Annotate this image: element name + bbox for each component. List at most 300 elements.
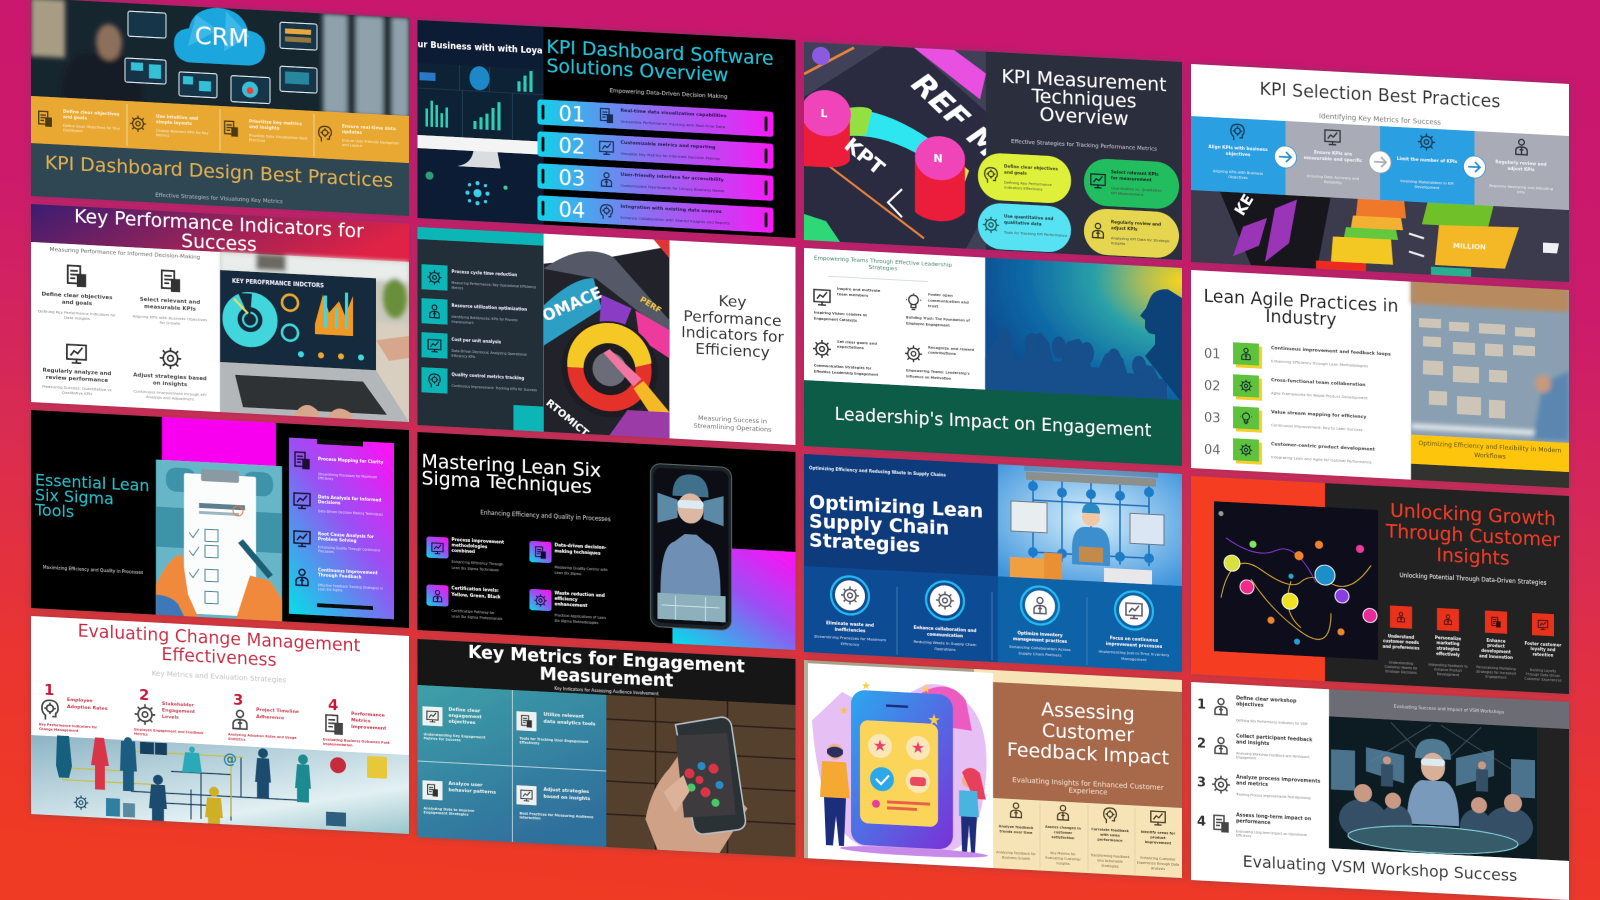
list: numbered capabilities: 03 <box>558 164 585 191</box>
subtitle: Empowering Data-Driven Decision Making <box>610 88 728 100</box>
columns: four strategies: Streamlining Processes for Maximum <box>814 634 886 642</box>
panel: Assessing Customer Feedback Impact <box>804 660 1182 878</box>
sidebar: Resource utilization optimization <box>452 303 527 312</box>
pills: four strategies: Define clear objectives <box>1004 164 1058 171</box>
columns: feedback actions <box>996 800 1179 876</box>
band: four best practices: and Layout <box>342 143 363 148</box>
band: four best practices: Define Clear Objectives for Your <box>63 124 121 131</box>
image: planning board: Optimizing Efficiency and Flexibility in Modern <box>1418 440 1562 455</box>
columns: four insight actions: Personalize <box>1435 635 1461 641</box>
band: four best practices: Ensure User-Friendly Navigation <box>342 138 399 145</box>
list: four metrics: Evaluating Business Outcomes Post <box>323 737 390 745</box>
list: workshop steps: and insights <box>1236 739 1269 747</box>
list: four metrics: 3 <box>233 691 243 709</box>
columns: four strategies: Operations <box>934 646 956 652</box>
panel: gradient tools list: Data-Driven Decision Making Techniques <box>318 509 383 517</box>
subtitle: Unlocking Potential Through Data-Driven Strategies <box>1399 573 1547 587</box>
columns: four insight actions: Customer Needs for <box>1385 665 1418 671</box>
heading: Through Customer <box>1385 521 1560 552</box>
panel: teal metrics grid: Define clear <box>448 707 481 714</box>
grid: techniques: Practical Applications of Lean <box>554 613 606 620</box>
grid: techniques: Lean Six Sigma <box>554 571 581 576</box>
columns: four insight actions: development <box>1481 648 1511 654</box>
subtitle: Identifying Key Metrics for Success <box>1319 112 1441 127</box>
panel: Optimizing Lean Supply Chain Strategies <box>804 454 1182 672</box>
grid: leadership items: Inspiring Vision: Leaders as <box>814 311 867 317</box>
grid: four objectives: and goals <box>62 300 93 307</box>
image: planning board <box>1411 278 1569 488</box>
columns: four insight actions <box>1383 605 1562 683</box>
list: four metrics: Analyzing Adoption Rates and Usage <box>228 732 297 740</box>
list: workshop steps: Defining Key Performance Indicators for VSM <box>1236 718 1308 726</box>
list: workshop steps: 3 <box>1197 775 1206 791</box>
pills: four strategies: Analyzing KPI Data for Strategic <box>1111 236 1170 243</box>
columns: feedback actions: Experience through Data <box>1137 861 1179 867</box>
panel: gradient tools list: Effective Feedback Training Strategies in <box>318 583 383 591</box>
heading: Measurement <box>540 664 673 692</box>
panel: gradient tools list: Decisions <box>318 499 341 505</box>
list: four metrics <box>39 680 390 749</box>
band: four best practices: Metrics <box>156 133 169 138</box>
grid: four objectives: Defining Key Performance Indicators for <box>38 308 116 318</box>
columns: four selection steps: Limit the number of KPIs <box>1397 156 1458 165</box>
grid: leadership items: Set clear goals and <box>837 340 877 346</box>
heading: Six Sigma <box>35 485 114 508</box>
panel: teal metrics grid: Analyze user <box>449 781 483 788</box>
columns: four insight actions: Strategies for Increased <box>1476 670 1516 676</box>
pills: four strategies: Use quantitative and <box>1004 214 1053 221</box>
panel: teal metrics grid: data analytics tools <box>543 719 596 727</box>
panel: KPI Selection Best Practices <box>1191 64 1570 282</box>
gradient corner block <box>672 545 796 650</box>
columns: four strategies: communication <box>927 632 963 638</box>
list: numbered capabilities: Customizable Dashboards for Unique Business Needs <box>620 183 725 193</box>
heading: Effectiveness <box>161 645 277 671</box>
sidebar: Data-Driven Decisions: Analyzing Operational <box>451 349 527 357</box>
panel: teal metrics grid: Analyzing Data to Improve <box>423 806 475 813</box>
columns: four strategies: Efficiency <box>841 641 860 647</box>
heading: Optimizing Lean <box>809 491 983 522</box>
columns: four insight actions: strategies <box>1437 646 1460 652</box>
subtitle: Optimizing Efficiency and Reducing Waste in Supply Chains <box>809 465 946 478</box>
image: phone with helmeted woman <box>650 463 732 631</box>
pills: four strategies: qualitative data <box>1004 220 1042 227</box>
columns: four selection steps: objectives <box>1226 151 1251 158</box>
image: customer rating illustration: ★ <box>921 682 931 696</box>
grid: leadership items: Foster open <box>928 293 953 298</box>
columns: feedback actions: Assess changes in <box>1045 825 1081 831</box>
list: four metrics: Project Timeline <box>256 707 299 715</box>
heading: Evaluating Change Management <box>78 621 361 656</box>
columns: four insight actions: Personalizing Marketing <box>1476 665 1516 671</box>
image: performance gauge: OMACE <box>539 283 605 325</box>
list: four practices: Enhancing Efficiency through Lean Methodologies <box>1271 358 1368 368</box>
list: numbered capabilities: User-friendly interface for accessibility <box>620 172 724 183</box>
grid: leadership items <box>813 285 975 382</box>
columns: four insight actions: retention <box>1532 652 1554 658</box>
list: four metrics: Adoption Rates <box>67 704 108 712</box>
image: customer rating illustration: ★ <box>873 736 887 755</box>
list: workshop steps: Collect participant feedback <box>1236 733 1313 743</box>
list: four practices <box>1204 341 1391 472</box>
orange block <box>1191 476 1325 681</box>
band: four best practices: Choose Relevant KPIs for Key <box>156 129 209 135</box>
photo: CRM cloud with executive <box>31 0 409 118</box>
list: numbered capabilities: 04 <box>558 196 585 223</box>
grid: four objectives: Regularly analyze and <box>43 368 111 377</box>
list: workshop steps: 4 <box>1197 814 1206 830</box>
image: gauge with red cylinders: KPT <box>840 133 889 180</box>
band: four best practices: Define clear objectives <box>63 109 120 118</box>
grid: four objectives: Measuring Success: Quantitative vs <box>42 384 112 392</box>
panel: Key Performance Indicators for Success <box>31 204 409 422</box>
grid: four objectives: measurable KPIs <box>144 304 197 313</box>
columns: four strategies: Management <box>1121 656 1147 662</box>
list: four practices: 03 <box>1204 411 1221 427</box>
image: 3D blocks and board: KE TIM <box>1231 161 1275 219</box>
panel: gradient tools list: Problem Solving <box>318 536 357 543</box>
grid: four objectives: review performance <box>46 375 108 384</box>
panel: teal metrics grid: Interaction <box>520 815 541 821</box>
grid: leadership items: Empowering Teams: Leadership's <box>906 368 970 376</box>
list: four practices: 01 <box>1204 347 1221 363</box>
panel: Evaluating Change Management Effectiveness <box>31 616 409 834</box>
columns: four selection steps: Align KPIs with business <box>1208 144 1268 153</box>
columns: feedback actions: Correlate feedback <box>1091 827 1129 833</box>
columns: feedback actions: Enhancing Customer <box>1140 856 1176 862</box>
list: workshop steps: 2 <box>1197 736 1206 752</box>
band: four best practices: and goals <box>63 114 87 121</box>
grid: techniques: Certification levels: <box>451 585 499 594</box>
list: workshop steps: Analyzing Workshop Feedback and Participant <box>1236 751 1310 759</box>
grid: leadership items: Effective Leadership Engagement <box>814 370 879 377</box>
heading: Key <box>718 292 747 311</box>
grid: techniques <box>426 535 608 627</box>
grid: leadership items: team members <box>837 292 869 298</box>
image: gauge with red cylinders: L <box>820 107 828 120</box>
heading: Strategies <box>809 529 920 557</box>
pills: four strategies: and goals <box>1004 170 1027 176</box>
list: workshop steps: Assess long-term impact on <box>1236 812 1312 822</box>
columns: four insight actions: Enhance <box>1486 638 1506 644</box>
heading: Indicators for <box>681 323 784 346</box>
columns: four insight actions: and innovation <box>1479 653 1513 660</box>
list: four metrics: Change Management <box>39 727 79 733</box>
heading: Supply Chain <box>809 510 949 540</box>
list: four metrics: 1 <box>44 681 54 699</box>
list: four metrics: Metrics <box>134 732 148 737</box>
pills: four strategies: Insights <box>1111 241 1125 246</box>
title panel <box>993 682 1182 808</box>
icon: CRM cloud <box>174 6 265 66</box>
subtitle: Evaluating Success and Impact of VSM Workshops <box>1394 704 1505 716</box>
heading: Tools <box>34 500 74 521</box>
columns: feedback actions: Strategies <box>1101 864 1119 869</box>
image: glowing customer journey network <box>1214 501 1378 660</box>
columns: four insight actions: Development <box>1437 672 1460 677</box>
pills: four strategies: Regularly review and <box>1111 219 1161 227</box>
title panel: Feedback Impact <box>1007 739 1169 769</box>
columns: four selection steps: Aligning KPIs with Business <box>1213 169 1263 176</box>
list: four practices: 04 <box>1204 443 1221 459</box>
heading: Mastering Lean Six <box>422 450 601 482</box>
grid: four objectives: Analysis and Adjustment <box>146 394 195 402</box>
pills: four strategies: Defining Key Performance <box>1004 181 1053 187</box>
list: workshop steps: objectives <box>1236 701 1264 709</box>
subtitle: Key Metrics and Evaluation Strategies <box>152 668 287 685</box>
columns: four strategies: Supply Chain Partners <box>1019 650 1061 658</box>
panel: teal metrics grid: Adjust strategies <box>543 787 589 795</box>
columns: four insight actions: Enhance Product <box>1434 667 1463 673</box>
grid: leadership items: expectations <box>837 345 865 350</box>
grid: four objectives: Select relevant and <box>140 297 200 306</box>
grid: leadership items: Recognize and reward <box>928 346 975 352</box>
grid: techniques: enhancement <box>554 601 587 609</box>
list: numbered capabilities: Streamline Performance Tracking with Real-Time Data <box>620 119 726 129</box>
columns: four selection steps: Reliability <box>1324 180 1343 185</box>
columns: four strategies <box>814 575 1170 669</box>
list: four practices: Value stream mapping for efficiency <box>1271 409 1366 420</box>
image: customer rating illustration: ★ <box>911 738 925 757</box>
grid: four objectives: Qualitative KPIs <box>62 390 92 396</box>
panel: teal metrics grid: Effectively <box>520 740 540 746</box>
image: dashboard monitor: ur Business with with Loya <box>418 40 542 57</box>
columns: feedback actions: Business Growth <box>1002 855 1030 861</box>
image: connected people network: @ <box>223 751 237 768</box>
panel: teal metrics grid <box>418 685 606 847</box>
image: performance gauge: RTOMICT <box>544 398 590 439</box>
image: 3D blocks and board: MILLION <box>1453 242 1486 252</box>
sidebar: Process cycle time reduction <box>452 269 517 277</box>
columns: feedback actions: into Actionable <box>1097 859 1123 864</box>
band: four best practices: Practices <box>249 138 265 143</box>
columns: four insight actions: Building Loyalty <box>1530 668 1556 673</box>
panel: Unlocking Growth Through Customer Insights <box>1191 476 1569 694</box>
panel: teal metrics grid: Engagement Strategies <box>423 810 469 817</box>
panel: gradient tools list: Process Mapping for Clarity <box>318 456 384 465</box>
list: numbered capabilities: 01 <box>558 100 585 127</box>
title panel: Customer <box>1042 720 1134 746</box>
panel: teal metrics grid: Understanding Key Engagement <box>424 732 486 740</box>
title panel: Experience <box>1068 787 1108 797</box>
subtitle: Enhancing Efficiency and Quality in Processes <box>480 510 611 523</box>
grid: four objectives: Adjust strategies based <box>133 372 207 382</box>
list: numbered capabilities <box>538 99 774 233</box>
columns: four selection steps: Regularly review and <box>1495 159 1547 168</box>
columns: four selection steps: adjust KPIs <box>1507 166 1535 173</box>
grid: four objectives: Data Insights <box>64 315 90 321</box>
sidebar: Metrics <box>452 286 464 290</box>
columns: four strategies: inefficiencies <box>835 627 866 633</box>
columns: feedback actions: Evaluating Customer <box>1045 856 1081 862</box>
band: four best practices: simple layouts <box>156 119 192 127</box>
panel: Key Performance Indicators for Efficiency <box>418 227 796 450</box>
grid: leadership items: Inspire and motivate <box>837 287 881 293</box>
grid: four objectives: Continuous Improvement through KPI <box>133 388 207 397</box>
columns: four strategies: management practices <box>1013 636 1068 644</box>
grid: techniques: methodologies <box>452 542 488 550</box>
image: gauge with red cylinders: REF M <box>905 67 1006 165</box>
columns: feedback actions: Analyze feedback <box>999 824 1034 830</box>
panel: teal metrics grid: engagement <box>448 713 482 720</box>
columns: four selection steps: Development <box>1415 185 1440 190</box>
pills: four strategies: Select relevant KPIs <box>1111 169 1159 177</box>
grid: techniques: Certification Pathway for <box>451 609 495 615</box>
image: gauge with red cylinders: N <box>933 152 943 165</box>
grid: leadership items: contributions <box>928 351 957 356</box>
columns: four insight actions: Understand <box>1388 633 1414 640</box>
image: customer rating illustration: ★ <box>839 704 849 717</box>
columns: feedback actions: Identify areas for <box>1141 830 1175 836</box>
columns: four insight actions: product <box>1487 643 1505 649</box>
grid: four objectives: for Growth <box>160 320 181 326</box>
panel: gradient tools list: Root Cause Analysis for <box>318 531 375 539</box>
heading: Sigma Techniques <box>422 467 592 498</box>
list: four practices: Cross-functional team collaboration <box>1271 377 1366 388</box>
columns: feedback actions: improvement <box>1145 840 1171 845</box>
band: four best practices: Dashboard <box>63 128 82 133</box>
subtitle: Measuring Performance for Informed Decision-Making <box>50 247 201 261</box>
image: dashboard monitor <box>418 20 544 225</box>
list: four metrics: Engagement <box>162 707 196 715</box>
panel: gradient tools list: Enhancing Quality Through Continuous <box>318 545 381 553</box>
columns: four insight actions: customer needs <box>1383 638 1420 645</box>
panel: teal metrics grid: Utilize relevant <box>543 712 585 720</box>
list: four metrics: Stakeholder <box>162 701 195 709</box>
columns: feedback actions: satisfaction <box>1051 835 1075 840</box>
columns: feedback actions: product <box>1150 835 1166 840</box>
heading: Insights <box>1436 545 1510 570</box>
columns: four strategies: Eliminate waste and <box>826 620 874 628</box>
subtitle: Empowering Teams Through Effective Leadership <box>814 256 952 269</box>
subtitle: Effective Strategies for Tracking Performance Metrics <box>1011 139 1157 153</box>
subtitle: Strategies <box>869 265 897 272</box>
columns: feedback actions: Insights <box>1056 861 1070 866</box>
grid: leadership items: Influence on Motivation <box>906 374 952 381</box>
panel: Mastering Lean Six Sigma Techniques <box>418 432 796 650</box>
panel: gradient tools list: Streamlining Processes for Maximum <box>318 472 377 479</box>
grid: leadership items: Engagement Catalysts <box>814 317 857 323</box>
list: four metrics: 4 <box>328 696 338 714</box>
columns: four strategies: Implementing Just-in-Time Inventory <box>1099 649 1170 657</box>
pills: four strategies: for measurement <box>1111 175 1152 182</box>
band: four best practices: Prioritize key metrics <box>249 119 302 127</box>
pills: four strategies: Tools for Tracking KPI Performance <box>1003 231 1068 238</box>
list: numbered capabilities: 02 <box>558 132 585 159</box>
heading: Solutions Overview <box>546 55 728 86</box>
list: numbered capabilities: Real-time data visualization capabilities <box>620 108 727 119</box>
grid: techniques: Enhancing Efficiency Through <box>452 560 503 567</box>
band: four best practices: and insights <box>249 124 280 132</box>
list: workshop steps: Analyze process improvements <box>1236 774 1320 785</box>
columns: four selection steps: Regularly Reviewing and Adjusting <box>1489 184 1553 191</box>
image: customer rating illustration: ★ <box>861 679 871 693</box>
sidebar: Identifying Bottlenecks: KPIs for Process <box>452 315 518 322</box>
sidebar: Quality control metrics tracking <box>451 372 524 381</box>
sidebar: Continuous Improvement: Tracking KPIs for Success <box>451 384 537 392</box>
grid: techniques: Data-driven decision- <box>554 542 607 551</box>
image: crowd and leader silhouette <box>984 258 1182 400</box>
image: performance gauge <box>539 234 670 439</box>
columns: four insight actions: marketing <box>1436 640 1460 646</box>
list: four metrics: Statistics <box>228 737 245 742</box>
columns: four selection steps <box>1191 116 1570 210</box>
band: four best practices: Use intuitive and <box>156 114 198 122</box>
heading: Key Performance Indicators for <box>74 206 364 243</box>
columns: four selection steps: KPIs <box>1517 190 1525 195</box>
panel: Essential Lean Six Sigma Tools <box>31 410 409 628</box>
heading: Industry <box>1265 307 1337 331</box>
title panel: Assessing <box>1041 699 1135 726</box>
panel: gradient tools list: Lean Six Sigma <box>318 587 342 592</box>
panel: teal metrics grid: Tools for Tracking User Engagement <box>520 736 589 744</box>
columns: four strategies: Reducing Waste in Supply Chain <box>914 639 977 647</box>
image: gauge with red cylinders <box>804 42 1006 250</box>
panel: gradient tools list: Data Analysis for Informed <box>318 494 381 503</box>
icon: CRM cloud: CRM <box>195 22 249 53</box>
pills: four strategies: Indicators Effectively <box>1004 186 1043 192</box>
columns: four strategies: Enhancing Collaboration Across <box>1009 644 1071 652</box>
top bar <box>1329 689 1569 729</box>
columns: four selection steps: Ensuring Data Accuracy and <box>1307 174 1359 181</box>
columns: four insight actions: and preferences <box>1383 644 1420 651</box>
subtitle: Effective Strategies for Visualizing Key Metrics <box>155 193 283 205</box>
list: workshop steps: Evaluating Long-term Impact on Operational <box>1236 829 1307 837</box>
panel: gradient tools list: Through Feedback <box>318 572 362 580</box>
list: workshop steps <box>1197 693 1320 842</box>
panel: KPI Dashboard Design Best Practices <box>31 0 409 216</box>
grid: techniques: Lean Six Sigma Professionals <box>451 614 502 621</box>
columns: feedback actions: Analysis <box>1151 866 1165 871</box>
columns: four selection steps: Ensure KPIs are <box>1314 150 1352 158</box>
list: workshop steps: performance <box>1236 818 1271 826</box>
grid: techniques: efficiency <box>554 596 578 603</box>
panel: Key Metrics for Engagement Measurement <box>418 639 796 857</box>
heading: Lean Agile Practices in <box>1204 287 1398 317</box>
columns: four insight actions: Strategic Decisions <box>1385 669 1417 675</box>
grid: techniques: Six Sigma Methodologies <box>554 619 599 625</box>
columns: four insight actions: Foster customer <box>1525 641 1561 648</box>
heading: Unlocking Growth <box>1390 501 1556 530</box>
grid: techniques: Process improvement <box>452 537 504 546</box>
grid: four objectives: Define clear objectives <box>42 292 113 301</box>
columns: four insight actions: effectively <box>1436 651 1460 657</box>
grid: leadership items: Communication Strategies for <box>814 364 872 371</box>
pills: four strategies <box>978 152 1179 259</box>
list: four metrics: Performance <box>351 711 385 719</box>
panel: gradient tools list: Efficiency <box>318 476 333 481</box>
list: four practices: Agile Frameworks for Rapid Product Development <box>1271 390 1368 400</box>
list: workshop steps: Define clear workshop <box>1236 695 1297 705</box>
panel: KPI Dashboard Software Solutions <box>418 20 796 238</box>
band: four best practices: Ensure real-time data <box>342 123 396 132</box>
sidebar: Measuring Performance: Key Operational Efficiency <box>452 281 536 289</box>
columns: feedback actions: customer <box>1054 830 1072 835</box>
columns: feedback actions: trends over time <box>1000 829 1033 835</box>
subtitle: Streamlining Operations <box>694 422 772 434</box>
grid: leadership items: communication and <box>928 299 969 305</box>
band: four best practices <box>31 96 409 163</box>
header band <box>31 204 409 262</box>
pills: four strategies: Quantitative vs. Qualitative <box>1111 186 1162 193</box>
grid: techniques: making techniques <box>554 548 601 557</box>
heading: KPI Measurement <box>1001 65 1167 96</box>
image: clipboard checklist <box>156 460 282 621</box>
list: numbered capabilities: Visualize Key Metrics for Informed Decision Making <box>620 151 720 161</box>
heading: KPI Selection Best Practices <box>1260 80 1500 112</box>
list: four practices: Continuous improvement and feedback loops <box>1271 345 1391 358</box>
image: laptop dashboard: KEY PEROFRMANCE INDCTORS <box>232 278 324 290</box>
